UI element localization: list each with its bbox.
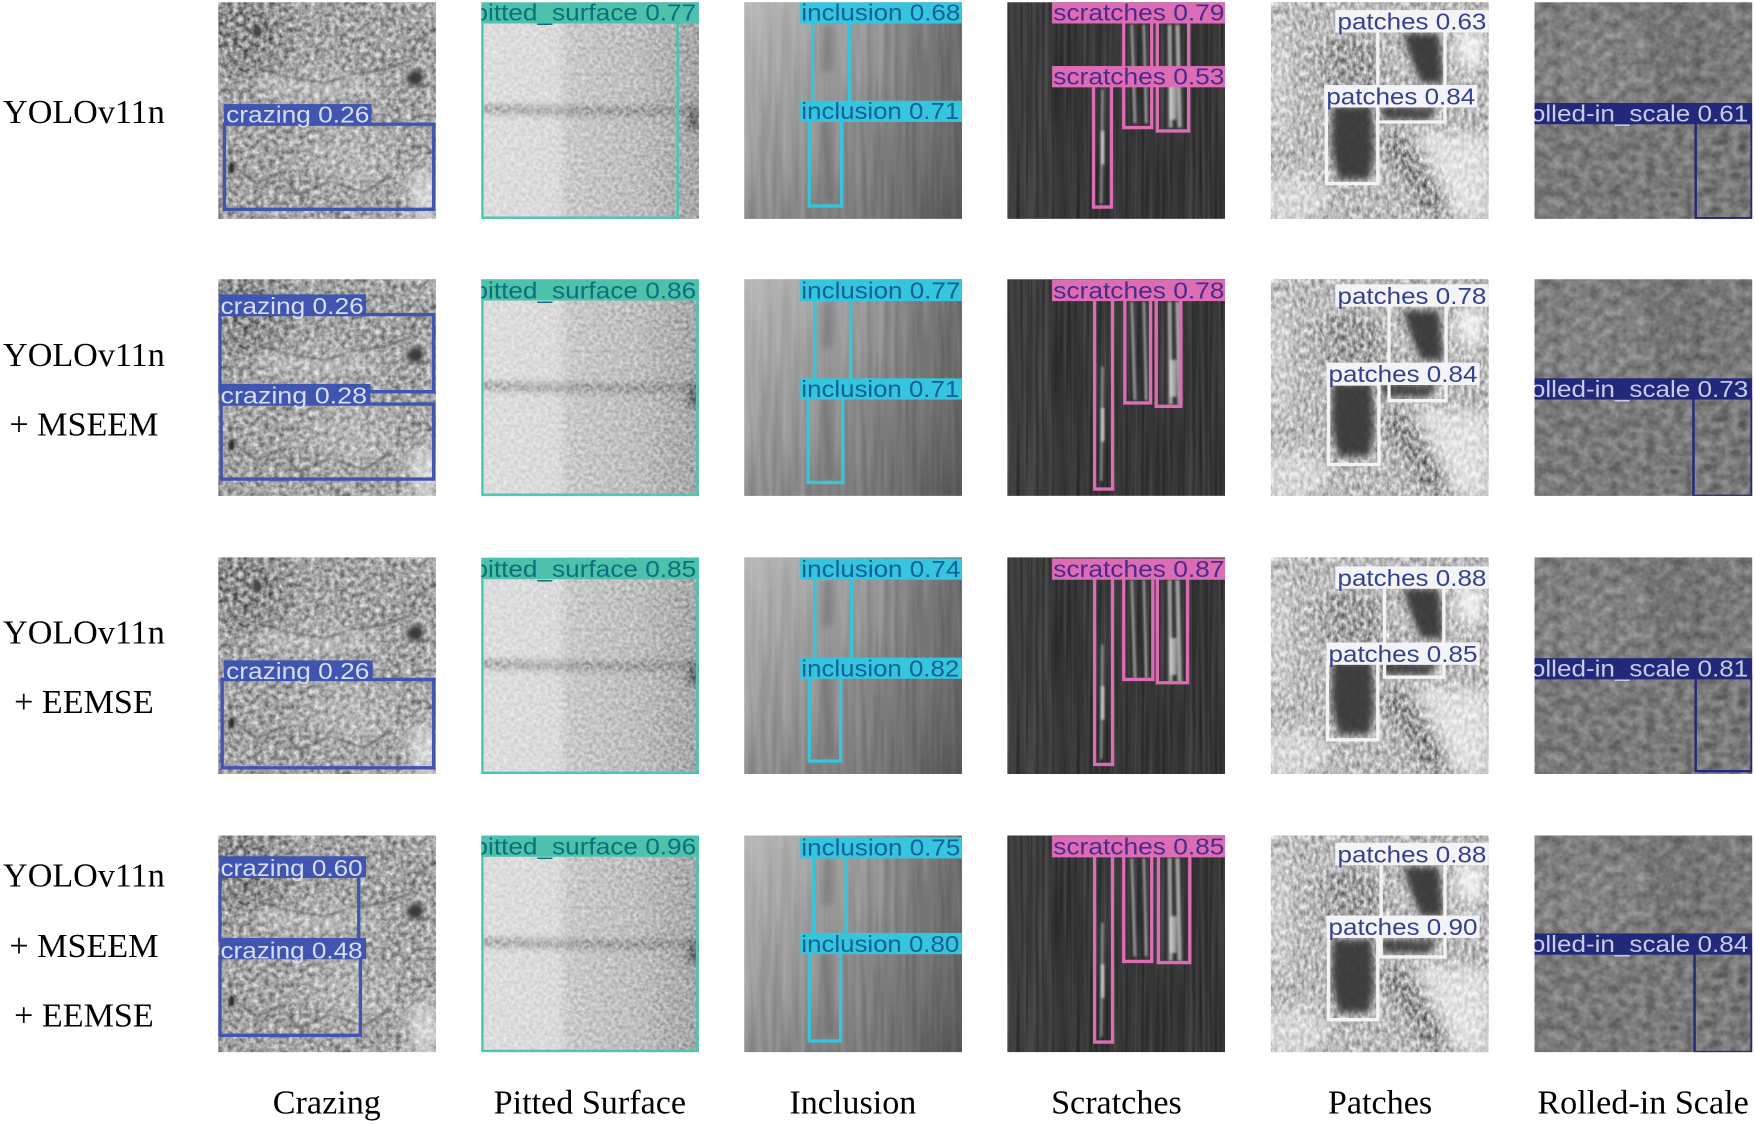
row label: YOLOv11n + EEMSE xyxy=(3,615,165,721)
column caption: Patches: Patches xyxy=(1328,1085,1432,1122)
panel: row 4 inclusion: inclusion 0.75 xyxy=(801,835,960,861)
panel: row 1 scratches: scratches 0.53 xyxy=(1053,64,1224,90)
row label: YOLOv11n + EEMSE: YOLOv11n xyxy=(3,615,165,652)
row label: YOLOv11n + MSEEM + EEMSE: + MSEEM xyxy=(9,928,159,965)
panel: row 4 scratches: scratches 0.85 xyxy=(1053,834,1224,860)
panel: row 2 scratches xyxy=(1007,277,1226,496)
panel: row 2 pitted surface xyxy=(473,277,699,496)
panel: row 1 patches xyxy=(1270,2,1489,219)
row label: YOLOv11n: YOLOv11n xyxy=(3,94,165,131)
panel: row 3 patches: patches 0.85 xyxy=(1329,641,1477,667)
column caption: Rolled-in Scale: Rolled-in Scale xyxy=(1537,1085,1749,1122)
panel: row 4 patches: patches 0.88 xyxy=(1338,841,1486,867)
panel: row 4 rolled-in scale xyxy=(1522,836,1752,1052)
panel: row 2 rolled-in scale xyxy=(1522,279,1752,496)
panel: row 2 patches: patches 0.78 xyxy=(1338,283,1486,309)
panel: row 2 inclusion: inclusion 0.71 xyxy=(801,376,959,402)
panel: row 3 pitted surface xyxy=(473,556,699,774)
panel: row 3 rolled-in scale xyxy=(1522,557,1752,774)
panel: row 1 patches: patches 0.63 xyxy=(1338,9,1486,35)
panel: row 2 inclusion xyxy=(744,277,962,496)
panel: row 4 patches: patches 0.90 xyxy=(1329,914,1477,940)
panel: row 3 crazing: crazing 0.26 xyxy=(226,658,369,684)
panel: row 4 pitted surface: pitted_surface 0.96 xyxy=(473,834,696,860)
panel: row 3 patches xyxy=(1270,557,1489,774)
panel: row 1 patches: patches 0.84 xyxy=(1326,84,1475,110)
panel: row 3 pitted surface: pitted_surface 0.85 xyxy=(473,556,696,582)
panel: row 3 crazing xyxy=(218,557,436,774)
panel: row 4 crazing: crazing 0.60 xyxy=(220,855,363,881)
row label: YOLOv11n + MSEEM xyxy=(3,337,165,443)
panel: row 3 inclusion: inclusion 0.74 xyxy=(801,556,960,582)
panel: row 1 crazing: crazing 0.26 xyxy=(226,102,369,128)
panel: row 1 rolled-in scale: rolled-in_scale 0.61 xyxy=(1522,100,1748,126)
panel: row 4 inclusion: inclusion 0.80 xyxy=(801,931,959,957)
panel: row 1 inclusion: inclusion 0.71 xyxy=(801,98,959,124)
panel: row 1 scratches: scratches 0.79 xyxy=(1053,0,1224,26)
panel: row 1 inclusion: inclusion 0.68 xyxy=(801,0,960,26)
panel: row 2 rolled-in scale: rolled-in_scale 0.73 xyxy=(1522,376,1748,402)
row label: YOLOv11n + MSEEM: + MSEEM xyxy=(9,406,159,443)
panel: row 4 rolled-in scale: rolled-in_scale 0.84 xyxy=(1522,931,1748,957)
panel: row 3 inclusion xyxy=(744,556,962,774)
panel: row 4 crazing: crazing 0.48 xyxy=(220,938,363,964)
panel: row 4 patches xyxy=(1270,836,1489,1052)
panel: row 4 scratches xyxy=(1007,834,1226,1052)
row label: YOLOv11n + MSEEM + EEMSE: YOLOv11n xyxy=(3,857,165,894)
row label: YOLOv11n + EEMSE: + EEMSE xyxy=(14,684,154,721)
panel: row 3 scratches xyxy=(1007,556,1226,774)
panel: row 2 patches xyxy=(1270,279,1489,496)
panel: row 2 inclusion: inclusion 0.77 xyxy=(801,277,960,303)
panel: row 2 patches: patches 0.84 xyxy=(1329,361,1477,387)
panel: row 4 crazing xyxy=(218,836,436,1052)
panel: row 3 patches: patches 0.88 xyxy=(1338,565,1486,591)
panel: row 2 crazing: crazing 0.26 xyxy=(220,293,364,319)
panel: row 1 rolled-in scale xyxy=(1522,2,1752,219)
panel: row 1 pitted surface xyxy=(473,0,699,219)
column caption: Scratches: Scratches xyxy=(1051,1085,1182,1122)
panel: row 3 inclusion: inclusion 0.82 xyxy=(801,656,959,682)
panel: row 1 crazing xyxy=(218,2,436,219)
column caption: Inclusion: Inclusion xyxy=(789,1085,916,1122)
panel: row 1 scratches xyxy=(1007,0,1226,219)
panel: row 4 inclusion xyxy=(744,835,962,1052)
column caption: Pitted Surface: Pitted Surface xyxy=(494,1085,686,1122)
row label: YOLOv11n + MSEEM + EEMSE xyxy=(3,857,165,1034)
column caption: Crazing: Crazing xyxy=(273,1085,381,1122)
panel: row 1 pitted surface: pitted_surface 0.77 xyxy=(473,0,696,26)
panel: row 1 inclusion xyxy=(744,0,962,219)
panel: row 3 scratches: scratches 0.87 xyxy=(1053,556,1224,582)
panel: row 2 crazing: crazing 0.28 xyxy=(220,382,367,408)
row label: YOLOv11n + MSEEM: YOLOv11n xyxy=(3,337,165,374)
panel: row 2 scratches: scratches 0.78 xyxy=(1053,277,1224,303)
panel: row 2 pitted surface: pitted_surface 0.86 xyxy=(473,277,696,303)
panel: row 4 pitted surface xyxy=(473,834,699,1052)
panel: row 2 crazing xyxy=(218,279,436,496)
row label: YOLOv11n + MSEEM + EEMSE: + EEMSE xyxy=(14,997,154,1034)
panel: row 3 rolled-in scale: rolled-in_scale 0.81 xyxy=(1522,656,1748,682)
